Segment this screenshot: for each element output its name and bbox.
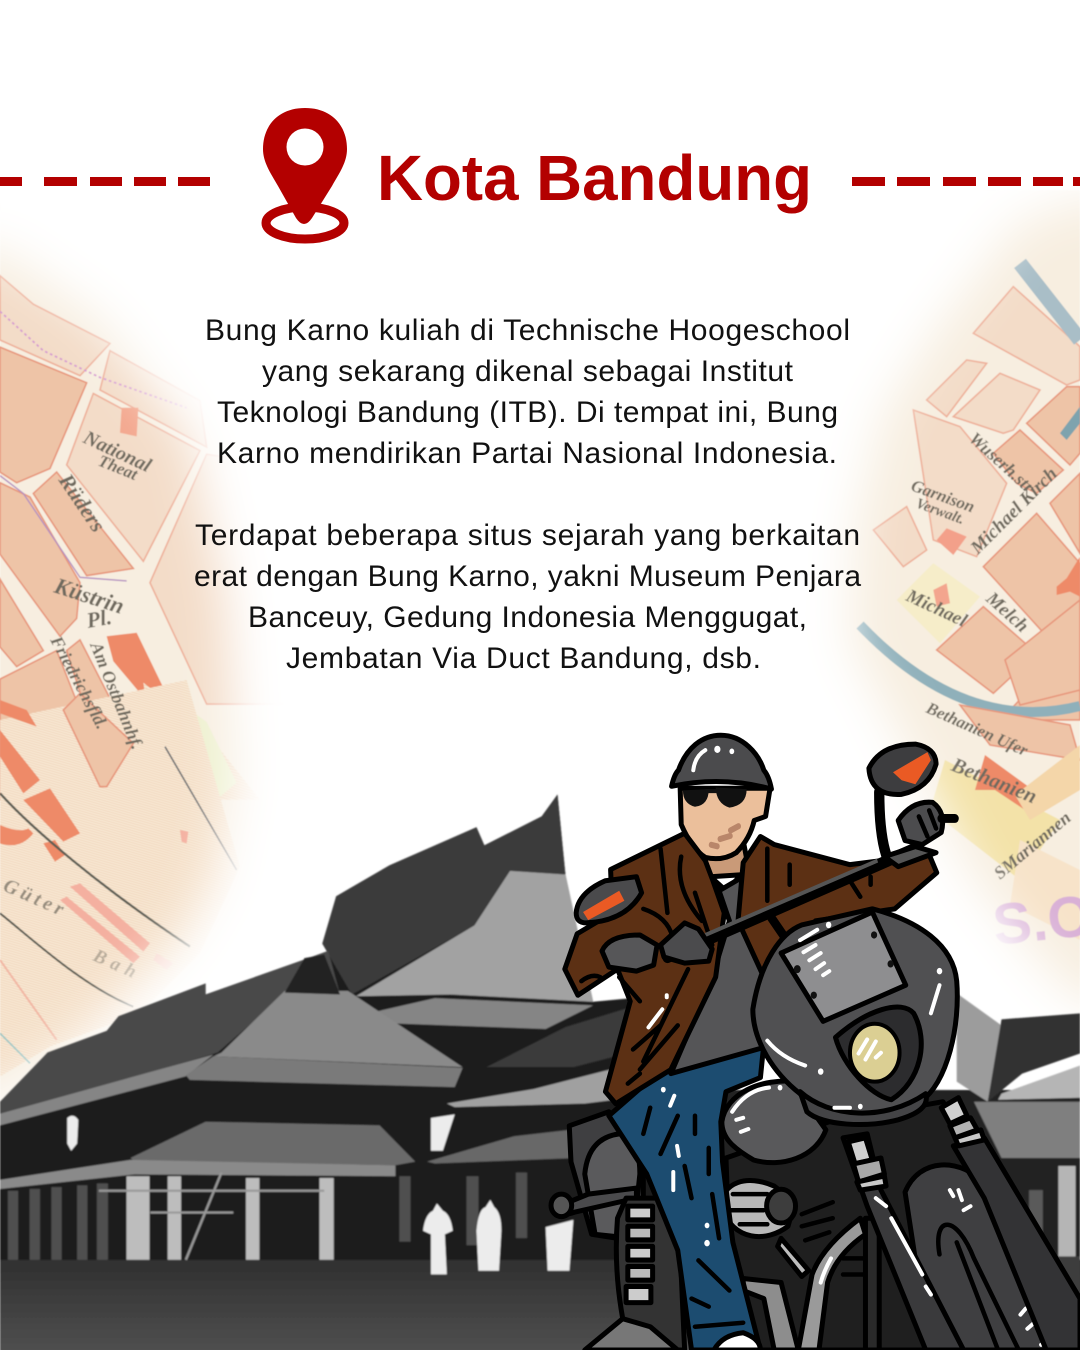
left mirror — [576, 877, 673, 937]
map labels: left: Pl. — [84, 604, 114, 633]
map labels: left: Friedrichsfld. — [46, 632, 112, 732]
lower left eave — [0, 1054, 214, 1125]
text block: paragraph two: erat dengan Bung Karno, yakni Museum Penjara — [194, 560, 861, 593]
photo: historic ITB hall building — [0, 795, 1080, 1350]
headlight — [835, 1007, 921, 1100]
fairing — [753, 909, 957, 1124]
map labels: left: Theat — [96, 451, 141, 484]
neck and head — [680, 788, 770, 891]
backdrop behind rider — [580, 1090, 1080, 1270]
title: Kota Bandung — [377, 142, 812, 214]
text block: paragraph two: Banceuy, Gedung Indonesia Menggugat, — [248, 601, 807, 634]
columns — [127, 1176, 334, 1260]
center eave band — [186, 1056, 463, 1087]
map labels: left: National — [79, 426, 155, 477]
grey shirt — [671, 875, 767, 1074]
map labels: left — [0, 426, 155, 985]
front wheel and tire — [905, 1165, 1080, 1350]
scaffold — [99, 1173, 324, 1260]
map labels: right — [902, 428, 1080, 958]
handlebar — [661, 847, 936, 963]
right mirror and stem — [869, 744, 936, 855]
map labels: left: Am Ostbahnhf. — [86, 638, 148, 752]
roof cap — [285, 954, 340, 994]
people in white — [67, 1114, 573, 1274]
illustration: rider on motorcycle — [551, 735, 1080, 1350]
map labels: right: Garnison — [909, 476, 977, 516]
map labels: right: Michael Kirch — [966, 463, 1062, 559]
map labels: right: Verwalt. — [914, 496, 966, 528]
icon: location pin — [263, 108, 347, 239]
right dark roof — [486, 994, 672, 1067]
right glove — [898, 802, 955, 845]
text block: paragraph one: yang sekarang dikenal sebagai Institut — [262, 355, 794, 388]
map labels: left: Bah — [89, 945, 145, 985]
rear shock and lower frame — [585, 1198, 685, 1350]
photo: right wing of building — [953, 993, 1080, 1350]
ground — [0, 1260, 1080, 1350]
map labels: right: SMariannen — [990, 807, 1075, 883]
left glove — [602, 935, 657, 971]
map labels: right: Melch — [981, 587, 1033, 637]
map labels: right: Michael — [902, 585, 971, 632]
light tower roof — [356, 871, 593, 1002]
white shoe — [714, 1333, 760, 1350]
center cone roof — [214, 991, 463, 1067]
map labels: left: Küstrin — [51, 573, 127, 619]
map: left vintage city map — [0, 242, 261, 1100]
helmet — [672, 735, 771, 789]
lower porch roof — [130, 1122, 415, 1165]
text block: paragraph two — [194, 519, 861, 675]
map labels: right: Bethanien Ufer — [922, 698, 1031, 760]
text block: paragraph one: Teknologi Bandung (ITB). Di tempat ini, Bung — [217, 396, 838, 429]
map labels: left: Rüders — [53, 468, 111, 537]
dark upper roof — [322, 795, 565, 994]
map labels: left: Güter — [0, 874, 71, 922]
front forks — [843, 1098, 1080, 1350]
engine block — [721, 1102, 984, 1350]
long left roof — [0, 951, 340, 1116]
map: right vintage city map — [838, 190, 1080, 1008]
map labels: right: Wuserh.str — [965, 428, 1039, 498]
mid eave roof — [372, 998, 593, 1029]
decorative dashed line: left — [0, 177, 210, 186]
text block: paragraph one: Bung Karno kuliah di Technische Hoogeschool — [205, 314, 850, 347]
text block: paragraph one — [205, 314, 850, 470]
jacket: left side and sleeve — [565, 833, 724, 1104]
text block: paragraph one: Karno mendirikan Partai Nasional Indonesia. — [217, 437, 837, 470]
text block: paragraph two: Terdapat beberapa situs sejarah yang berkaitan — [195, 519, 860, 552]
eave line — [0, 1160, 395, 1189]
jeans — [609, 1043, 764, 1350]
building silhouette — [0, 795, 672, 1263]
fuel tank — [722, 1081, 826, 1163]
map labels: right: Bethanien — [947, 752, 1040, 808]
decorative dashed line: right — [852, 177, 1080, 186]
sunglasses — [683, 788, 747, 808]
rear seat and pannier — [551, 1112, 643, 1242]
jacket: right side and sleeve — [738, 837, 937, 977]
text block: paragraph two: Jembatan Via Duct Bandung, dsb. — [286, 642, 761, 675]
